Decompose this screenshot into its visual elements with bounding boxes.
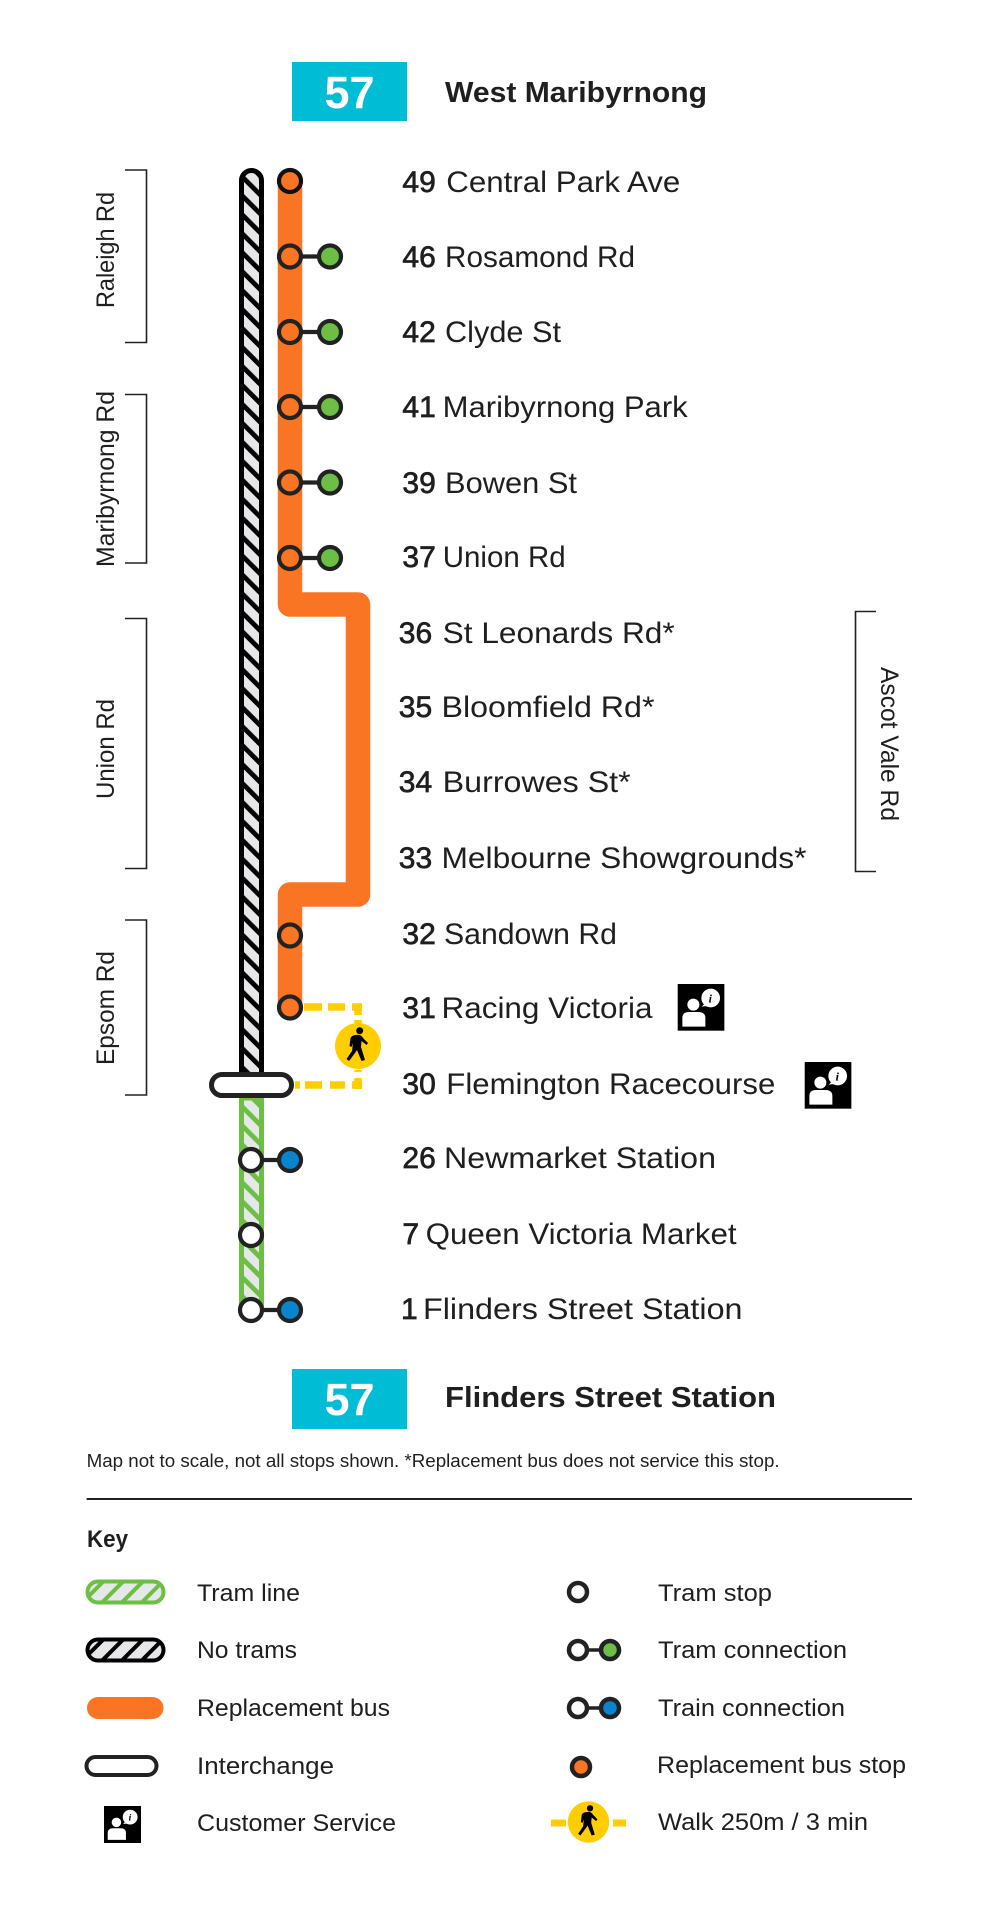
street bracket: Union Rd: Union Rd [92,699,120,799]
stop label 30: 30 [402,1068,436,1101]
stop 31 [279,996,301,1018]
route badge: 57 bottom [292,1369,407,1429]
key: interchange: Interchange [197,1753,334,1780]
stop label 26: Newmarket Station [444,1142,716,1175]
icon: customer service at Racing Victoria: i [709,991,713,1005]
stop label 46: Rosamond Rd [445,241,635,274]
stop label 1: 1 [401,1293,418,1326]
stop label 32: 32 [402,918,436,951]
icon: customer service at Flemington Racecourse [805,1062,851,1109]
street bracket: Union Rd [92,618,146,868]
key: no trams: No trams [197,1637,297,1664]
key: replacement bus stop: Replacement bus stop [657,1752,906,1779]
stop 39 with tram connection [279,472,341,494]
stop markers [240,170,341,1321]
interchange [212,1074,292,1096]
heading: West Maribyrnong: West Maribyrnong [445,77,707,109]
stop label 34: Burrowes St* [443,766,631,799]
stop 37 with tram connection [279,547,341,569]
stop label 7: Queen Victoria Market [426,1218,737,1251]
route badge: 57 top [292,62,407,121]
key: customer service: Customer Service [197,1810,396,1837]
key: tram line: Tram line [197,1580,300,1607]
street bracket: Ascot Vale Rd [856,612,903,872]
footnote: Map not to scale, not all stops shown. *Replacement bus does not service this stop. [87,1450,780,1471]
key: customer service: i [129,1814,132,1824]
heading: Flinders Street Station: Flinders Street Station [445,1382,776,1414]
street bracket: Maribyrnong Rd: Maribyrnong Rd [92,391,120,567]
walk icon [335,1023,381,1069]
replacement bus route [290,181,358,1007]
route badge: 57 top: 57 [324,67,375,118]
key: no trams [88,1637,297,1664]
stop label 30: Flemington Racecourse [446,1068,775,1101]
no trams line [242,170,262,1100]
stop label 35: 35 [399,691,432,724]
route badge: 57 bottom: 57 [324,1374,375,1425]
stop label 46: 46 [402,241,436,274]
stop 7 [240,1224,262,1246]
stop 42 with tram connection [279,321,341,343]
stop label 31: Racing Victoria [442,992,653,1025]
stop label 34: 34 [399,766,432,799]
icon: customer service at Flemington Racecourse: i [836,1069,840,1083]
stop label 39: Bowen St [445,467,578,500]
stop label 42: 42 [402,316,436,349]
walking connection dashed path [295,1004,362,1089]
stop label 31: 31 [402,992,436,1025]
key: tram connection: Tram connection [658,1637,847,1664]
stop 1 with train connection [240,1299,301,1321]
stop label 41: 41 [402,391,436,424]
stop label 26: 26 [402,1142,436,1175]
key: tram stop [569,1580,772,1607]
stop label 37: Union Rd [443,541,566,574]
key: replacement bus: Replacement bus [197,1695,390,1722]
key title: Key [87,1526,129,1553]
stop label 49: Central Park Ave [446,166,680,199]
stop label 49: 49 [402,166,436,199]
key: interchange [86,1753,334,1780]
stop 26 with train connection [240,1149,301,1171]
icon: customer service at Racing Victoria [678,984,724,1031]
stop label 36: 36 [399,617,432,650]
street bracket: Epsom Rd [92,920,146,1095]
stop 32 [279,924,301,946]
street bracket: Raleigh Rd [92,170,146,342]
key: walk: Walk 250m / 3 min [658,1809,868,1836]
street bracket: Maribyrnong Rd [92,391,146,567]
street bracket: Raleigh Rd: Raleigh Rd [92,192,120,308]
stop 41 with tram connection [279,396,341,418]
stop label 36: St Leonards Rd* [443,617,675,650]
key: train connection [569,1695,845,1722]
stop 46 with tram connection [279,246,341,268]
key: tram line [88,1580,300,1607]
stop label 41: Maribyrnong Park [443,391,689,424]
street bracket: Epsom Rd: Epsom Rd [92,951,120,1065]
key [86,1526,906,1843]
street bracket: Ascot Vale Rd: Ascot Vale Rd [875,667,903,821]
stop label 42: Clyde St [445,316,562,349]
key: customer service [104,1806,396,1843]
key: replacement bus [87,1695,390,1722]
stop label 33: Melbourne Showgrounds* [442,842,807,875]
key: walk [551,1801,868,1843]
key: train connection: Train connection [658,1695,845,1722]
tram line section [242,1098,262,1310]
key: tram connection [569,1637,847,1664]
stop label 37: 37 [402,541,436,574]
stop label 7: 7 [402,1218,419,1251]
stop label 39: 39 [402,467,436,500]
stop 49 [279,170,301,192]
key: tram stop: Tram stop [658,1580,772,1607]
stop label 35: Bloomfield Rd* [442,691,655,724]
stop label 1: Flinders Street Station [423,1293,742,1326]
stop label 32: Sandown Rd [444,918,617,951]
stop label 33: 33 [399,842,432,875]
